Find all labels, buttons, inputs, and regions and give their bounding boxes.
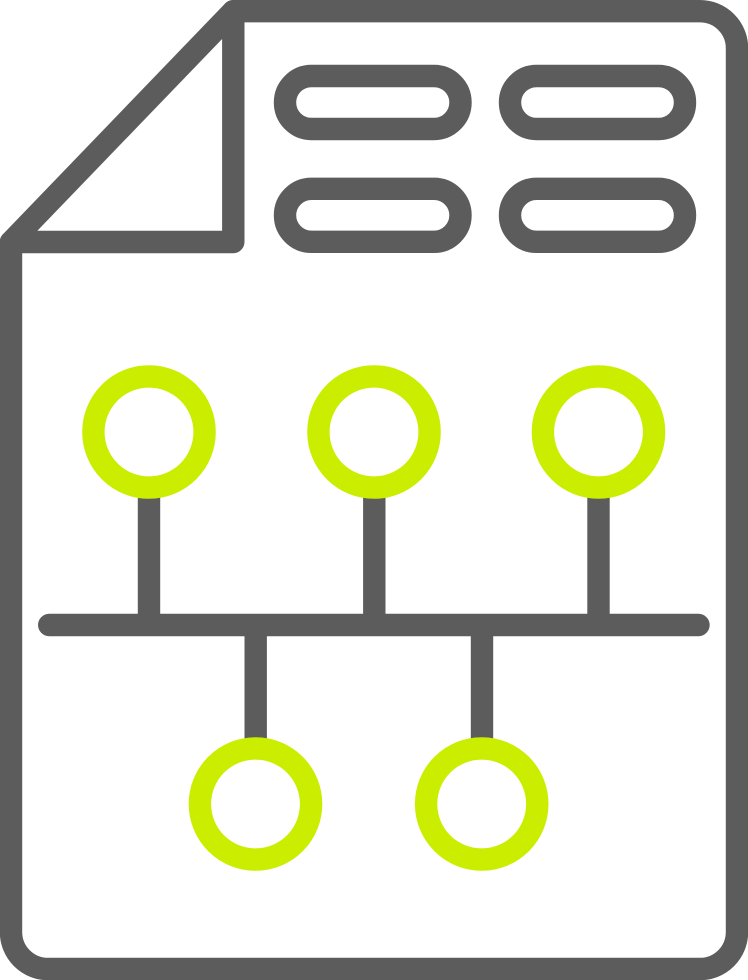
text placeholder pills	[285, 76, 685, 242]
folded corner	[11, 11, 233, 242]
timeline nodes	[93, 376, 654, 860]
timeline axis and connectors	[49, 490, 698, 750]
